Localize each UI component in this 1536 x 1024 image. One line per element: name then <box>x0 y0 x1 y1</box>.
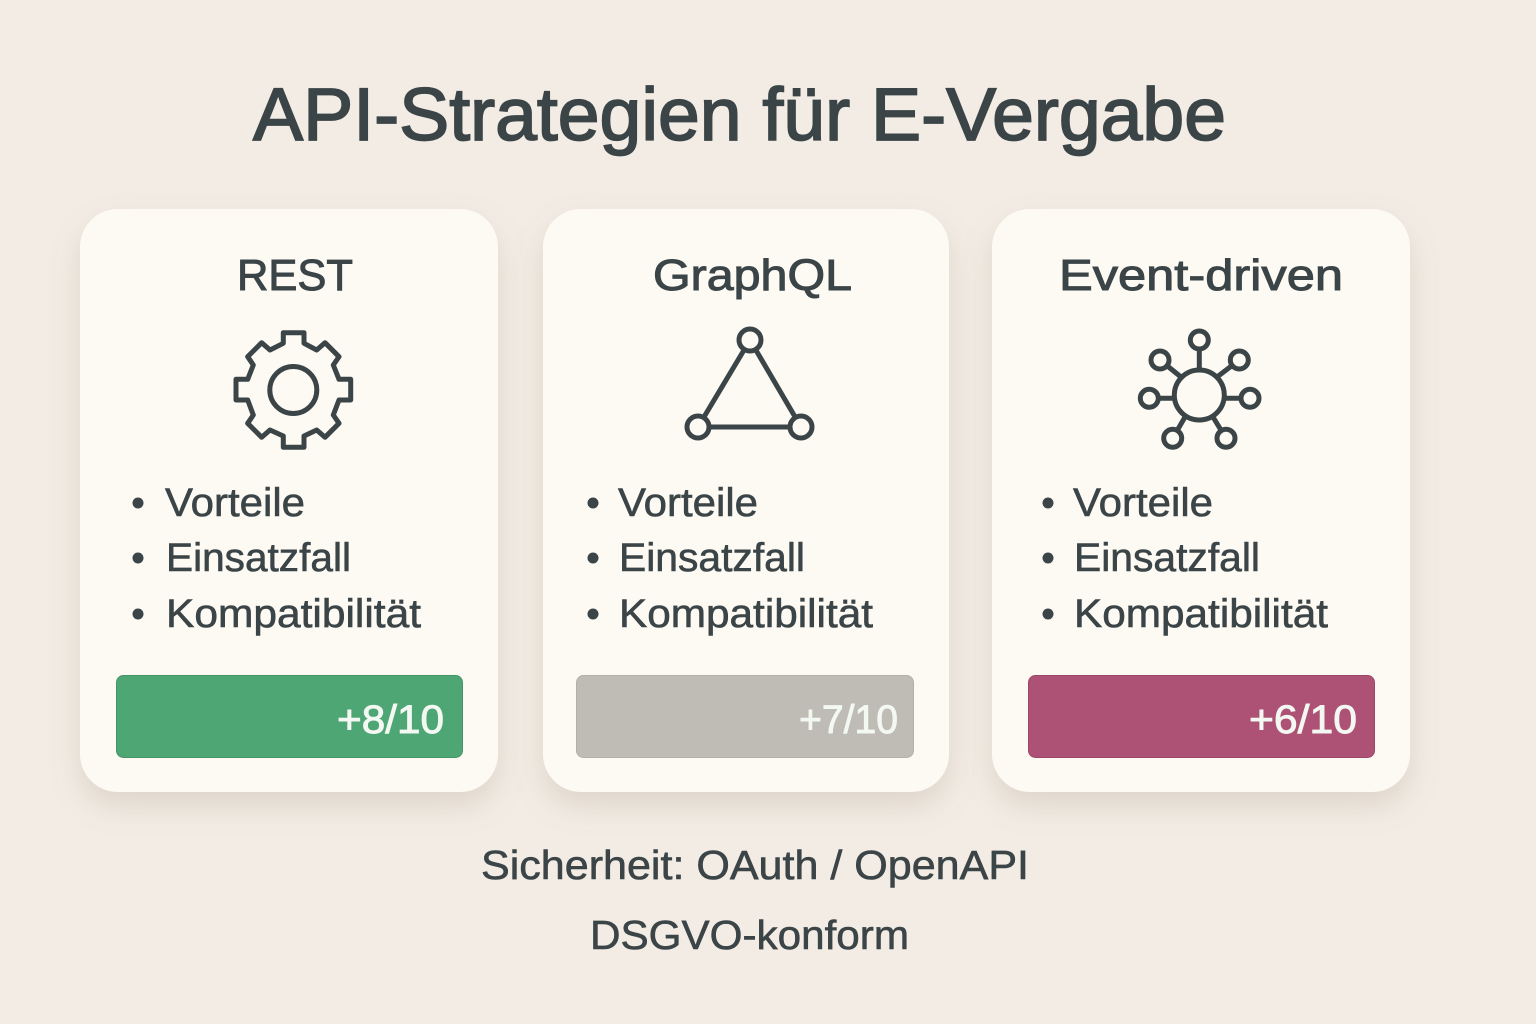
score bar: REST: +8/10 <box>337 698 444 742</box>
score bar: REST <box>116 676 462 758</box>
list: GraphQL criteria: Einsatzfall <box>619 536 805 580</box>
list: Event-driven criteria: Einsatzfall <box>1074 536 1260 580</box>
footer: security note: Sicherheit: OAuth / OpenAPI <box>481 842 1029 888</box>
list: REST criteria <box>132 481 421 636</box>
icon: triangle graph <box>687 329 812 438</box>
list: Event-driven criteria <box>1042 481 1328 636</box>
icon: gear <box>236 333 351 447</box>
score bar: Event-driven <box>1028 676 1374 758</box>
footer: GDPR note: DSGVO-konform <box>590 912 909 958</box>
title: API-Strategien für E-Vergabe <box>253 73 1226 156</box>
panel: GraphQL <box>543 209 949 792</box>
score bar: GraphQL: +7/10 <box>799 698 898 742</box>
score bar: Event-driven: +6/10 <box>1249 698 1357 742</box>
panel: REST <box>80 209 498 792</box>
list: REST criteria: Einsatzfall <box>166 536 351 580</box>
score bar: GraphQL <box>576 676 914 758</box>
heading: Event-driven: Event-driven <box>1059 251 1343 300</box>
heading: GraphQL: GraphQL <box>653 251 852 300</box>
list: GraphQL criteria: Vorteile <box>618 481 758 525</box>
heading: REST: REST <box>237 251 353 300</box>
list: REST criteria: Vorteile <box>165 481 305 525</box>
list: GraphQL criteria <box>588 481 873 636</box>
list: Event-driven criteria: Vorteile <box>1073 481 1213 525</box>
panel: Event-driven <box>992 209 1410 792</box>
list: REST criteria: Kompatibilität <box>166 592 421 636</box>
list: GraphQL criteria: Kompatibilität <box>619 592 873 636</box>
list: Event-driven criteria: Kompatibilität <box>1074 592 1328 636</box>
icon: event hub <box>1140 331 1259 447</box>
